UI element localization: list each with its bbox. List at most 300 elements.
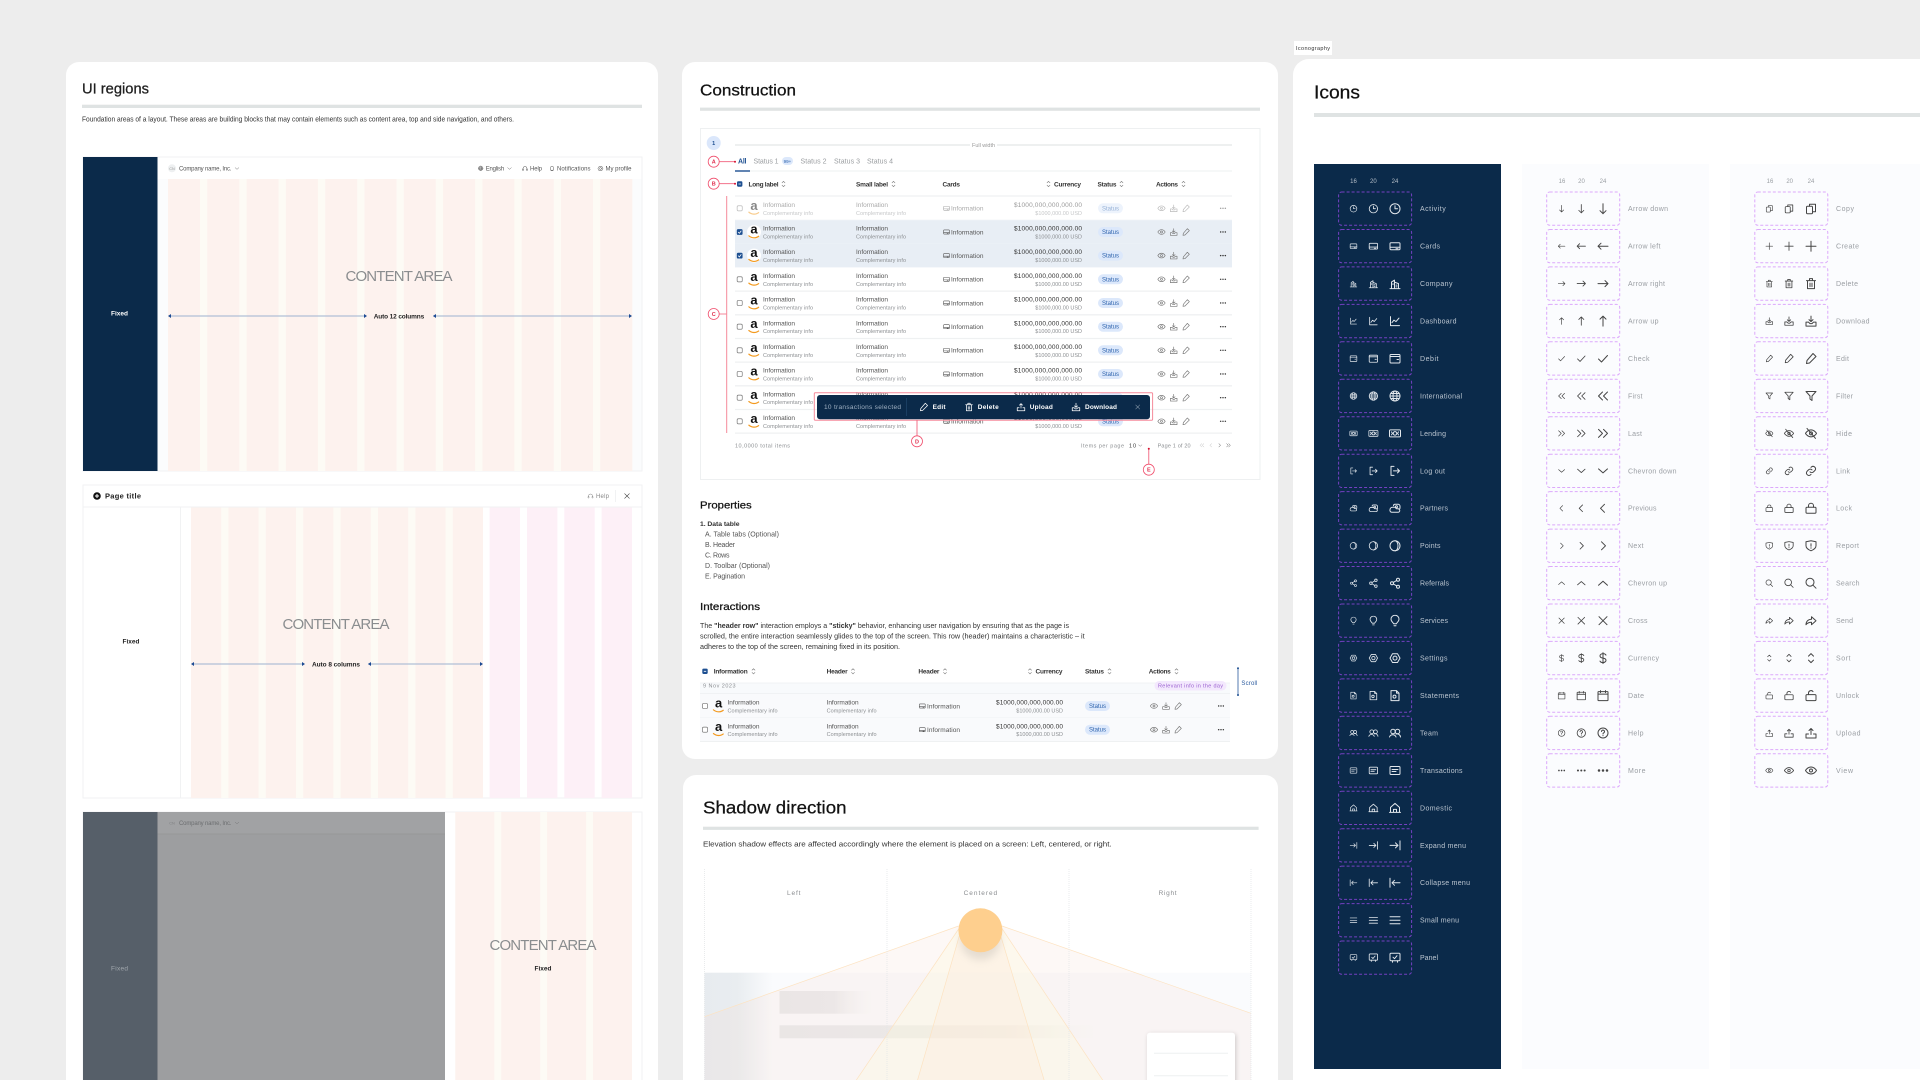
table row 1: disabled: Complementary info — [856, 211, 906, 217]
table row 10: Complementary info — [856, 424, 906, 430]
icon row: Chevron up — [1547, 566, 1667, 600]
icon row: Copy — [1755, 192, 1854, 225]
icon row: Search — [1755, 566, 1860, 600]
toolbar: bulk actions — [814, 393, 1153, 420]
table row 9: $1000,000.00 USD — [1035, 400, 1082, 406]
table row 8: Information — [763, 368, 795, 375]
light rays — [704, 926, 1251, 1080]
icon row: Collapse menu — [1339, 866, 1470, 899]
table tabs — [735, 157, 1232, 171]
sticky table row 1: Information — [728, 700, 760, 707]
icon row: Statements — [1339, 679, 1460, 712]
callout: rows bracket C — [708, 196, 727, 433]
interactions paragraph: scrolled, the entire interaction seamlessly glides to the top of the screen. This row (header) maintains a characteristic – it — [700, 634, 1085, 640]
icon row: Domestic: Domestic — [1420, 805, 1452, 812]
icon row: Referrals — [1339, 566, 1450, 600]
table row 7: a — [750, 340, 758, 355]
label: centered: Centered — [964, 890, 998, 897]
table row 5: Complementary info — [763, 306, 813, 312]
label: content area: CONTENT AREA — [282, 616, 390, 633]
icon row: Arrow down — [1547, 192, 1668, 225]
table row 1: disabled: a — [750, 198, 758, 213]
size header: 24 — [1392, 179, 1399, 185]
callout: tabs A — [708, 156, 736, 167]
region diagram: sidebar with 12 columns — [83, 157, 642, 471]
icon row: Sort: Sort — [1836, 655, 1851, 662]
top bar: Notifications — [557, 166, 590, 172]
arrow: auto 12 columns: Auto 12 columns — [374, 313, 425, 320]
sticky table row 1: Complementary info — [728, 708, 778, 714]
table row 8: Complementary info — [763, 376, 813, 382]
icon row: Cards: Cards — [1420, 244, 1440, 251]
region diagram: overlay drawer — [83, 812, 642, 1080]
icon row: Dashboard — [1339, 304, 1457, 338]
table row 1: disabled: Complementary info — [763, 211, 813, 217]
drawer columns — [455, 812, 632, 1080]
table row 7: $1000,000,000,000.00 — [1014, 344, 1082, 351]
table row 3: selected: Information — [856, 249, 888, 256]
icon row: Statements: Statements — [1420, 693, 1460, 700]
sticky table row 1: Information — [927, 703, 960, 710]
table header row: Cards — [942, 181, 960, 188]
table header row — [735, 181, 1232, 196]
table row 5: Information — [951, 300, 984, 307]
icon row: Chevron down — [1547, 454, 1677, 488]
icon row: Send — [1755, 604, 1853, 637]
dimmed sidebar: Fixed — [111, 965, 128, 972]
icon row: Transactions — [1339, 754, 1463, 787]
top bar — [158, 158, 642, 179]
size header: 20 — [1578, 179, 1585, 185]
icon row: Debit: Debit — [1420, 356, 1439, 363]
sticky table row 2 — [700, 718, 1230, 742]
sticky table row 2: Information — [728, 723, 760, 730]
icon row: Company: Company — [1420, 281, 1453, 288]
table row 1: disabled: Information — [763, 202, 795, 209]
icon row: Send: Send — [1836, 618, 1853, 625]
frame label: Iconography — [1294, 41, 1332, 55]
icon row: Arrow right: Arrow right — [1628, 281, 1665, 288]
icon row: Delete — [1755, 267, 1858, 300]
table row 8: $1000,000,000,000.00 — [1014, 368, 1082, 375]
sticky header row: Currency — [1036, 669, 1063, 676]
table row 4: Information — [856, 273, 888, 280]
interactions paragraph: adheres to the top of the screen, remaining fixed in its position. — [700, 644, 900, 651]
sticky table row 1: $1000,000,000,000.00 — [996, 700, 1063, 707]
table tabs: Status 4 — [867, 158, 893, 166]
table row 2: selected: Complementary info — [763, 234, 813, 240]
icon row: Check: Check — [1628, 356, 1650, 363]
sticky header row: Header — [827, 669, 848, 676]
dimmed sidebar — [83, 812, 158, 1080]
date row: 9 Nov 2023 — [703, 684, 736, 690]
table row 10: $1000,000,000,000.00 — [1014, 415, 1082, 422]
table row 2: selected: $1000,000,000,000.00 — [1014, 226, 1082, 233]
table row 2: selected: Information — [763, 226, 795, 233]
toolbar: bulk actions: Delete — [978, 404, 999, 411]
icon row: Expand menu — [1339, 829, 1466, 862]
table row 5: $1000,000.00 USD — [1035, 306, 1082, 312]
panel: Construction — [682, 62, 1278, 759]
table row 8 — [735, 364, 1232, 386]
size header — [1767, 179, 1815, 185]
table row 2: selected: Status — [1102, 230, 1119, 236]
table tabs: All — [738, 158, 747, 166]
table row 5 — [735, 292, 1232, 315]
icon row: Create: Create — [1836, 244, 1859, 251]
icon row: Activity: Activity — [1420, 206, 1446, 213]
icon row: Report — [1755, 529, 1859, 562]
icon row: Currency: Currency — [1628, 655, 1660, 662]
sticky table row 2: $1000,000,000,000.00 — [996, 723, 1063, 730]
icon row: Referrals: Referrals — [1420, 581, 1450, 588]
callout: pagination E: E — [1147, 468, 1151, 474]
sticky header table — [700, 667, 1257, 742]
table row 8: Information — [856, 368, 888, 375]
table header row: Actions — [1156, 181, 1178, 188]
sticky table row 1 — [700, 694, 1230, 718]
table row 7: Status — [1102, 348, 1119, 354]
full width indicator: Full width — [972, 143, 995, 149]
page title header: Page title — [105, 492, 141, 501]
table row 4: Complementary info — [763, 282, 813, 288]
table row 6: Information — [951, 324, 984, 331]
icon row: Currency — [1547, 641, 1660, 675]
icon row: Filter: Filter — [1836, 393, 1854, 400]
sticky header row: Status — [1085, 669, 1104, 676]
properties list: A. Table tabs (Optional) — [705, 531, 779, 538]
sticky header row: Information — [714, 669, 748, 676]
date row: Relevant info in the day — [1158, 684, 1223, 690]
pagination footer: Page 1 of 20 — [1158, 443, 1191, 449]
callout: toolbar D: D — [915, 439, 919, 445]
light source circle — [958, 908, 1002, 960]
icon row: Copy: Copy — [1836, 206, 1854, 213]
sticky table row 2: Status — [1089, 728, 1106, 734]
callout: rows bracket C: C — [712, 312, 716, 318]
icon row: Domestic — [1339, 791, 1452, 824]
sticky table row 2: Information — [927, 727, 960, 734]
shadow diagram — [704, 869, 1251, 1080]
date row — [700, 681, 1230, 694]
icon row: View — [1755, 754, 1854, 787]
properties list: E. Pagination — [705, 574, 745, 581]
icon row: Chevron up: Chevron up — [1628, 581, 1667, 588]
table row 4: Status — [1102, 277, 1119, 283]
table row 8: Status — [1102, 372, 1119, 378]
icon row: More: More — [1628, 768, 1646, 775]
region diagram: page title with 8 columns — [83, 485, 642, 798]
table row 4: a — [750, 269, 758, 284]
table row 1: disabled: Status — [1102, 206, 1119, 212]
data table anatomy — [700, 128, 1260, 480]
pagination footer: 10 — [1129, 443, 1136, 449]
icon row: Cross — [1547, 604, 1648, 637]
table row 6: a — [750, 316, 758, 331]
table row 5: Information — [763, 297, 795, 304]
icon row: Team: Team — [1420, 730, 1438, 737]
toolbar: bulk actions: Edit — [933, 404, 946, 411]
panel: Icons — [1293, 59, 1920, 1080]
table row 3: selected: Complementary info — [763, 258, 813, 264]
table row 9: a — [750, 387, 758, 402]
label: fixed: Fixed — [122, 638, 140, 645]
table row 3: selected: $1000,000.00 USD — [1035, 258, 1082, 264]
table row 6: Information — [763, 320, 795, 327]
page title header — [93, 490, 629, 502]
table row 10: $1000,000.00 USD — [1035, 424, 1082, 430]
table row 9: Status — [1102, 396, 1119, 402]
table row 10: Information — [951, 419, 984, 426]
sticky table row 2: Information — [827, 723, 859, 730]
heading: Properties: Properties — [700, 500, 752, 512]
table row 2: selected: Information — [856, 226, 888, 233]
top bar: CN — [169, 167, 175, 171]
label: left: Left — [787, 890, 801, 897]
callout: header B: B — [712, 182, 716, 188]
icon row: Company — [1339, 267, 1453, 300]
table row 4: Information — [763, 273, 795, 280]
icon row: Link: Link — [1836, 468, 1850, 475]
heading: Icons: Icons — [1314, 81, 1360, 102]
sticky table row 1: a — [715, 696, 723, 710]
table row 6: Information — [856, 320, 888, 327]
sticky table row 1: Information — [827, 700, 859, 707]
icon row: Expand menu: Expand menu — [1420, 843, 1466, 850]
table row 9: Information — [951, 395, 984, 402]
icon row: Unlock — [1755, 679, 1860, 712]
icon row: Last: Last — [1628, 431, 1642, 438]
label: content area: CONTENT AREA — [346, 268, 452, 285]
icon row: Hide — [1755, 417, 1852, 450]
table row 4: $1000,000.00 USD — [1035, 282, 1082, 288]
properties list: C. Rows — [705, 552, 730, 560]
sidebar: fixed: Fixed — [111, 311, 128, 318]
placeholder bars — [780, 991, 1093, 1038]
icon row: Services: Services — [1420, 618, 1448, 625]
arrow: auto 8 columns — [191, 661, 483, 668]
icon row: Arrow up: Arrow up — [1628, 319, 1659, 326]
icon row: Previous: Previous — [1628, 506, 1657, 513]
table row 2: selected: Information — [951, 229, 984, 236]
callout: header B — [708, 178, 736, 189]
icon row: Log out: Log out — [1420, 468, 1445, 475]
table row 6: $1000,000.00 USD — [1035, 329, 1082, 335]
icon row: View: View — [1836, 768, 1854, 775]
table row 6: $1000,000,000,000.00 — [1014, 320, 1082, 327]
icon row: Unlock: Unlock — [1836, 693, 1860, 700]
icon row: Settings — [1339, 641, 1448, 675]
frame label: Iconography: Iconography — [1296, 46, 1330, 52]
icon row: Help: Help — [1628, 730, 1644, 737]
icon row: Link — [1755, 454, 1850, 488]
panel: UI regions — [66, 62, 658, 1080]
table row 6: Complementary info — [856, 329, 906, 335]
table row 3: selected: Information — [763, 249, 795, 256]
table row 1: disabled: $1000,000.00 USD — [1035, 211, 1082, 217]
icon row: Lending: Lending — [1420, 431, 1446, 438]
sticky header row — [702, 669, 1178, 676]
size header: 20 — [1786, 179, 1794, 185]
page title header: Help — [596, 494, 610, 500]
table row 4: Complementary info — [856, 282, 906, 288]
icon row: Lending — [1339, 417, 1446, 450]
table row 7 — [735, 340, 1232, 362]
table row 1: disabled: $1000,000,000,000.00 — [1014, 202, 1082, 209]
marker 1 — [707, 136, 721, 150]
sticky header row: Actions — [1149, 669, 1171, 676]
label: right: Right — [1159, 890, 1177, 897]
pagination footer: 10,0000 total items — [735, 443, 790, 449]
size header: 16 — [1559, 179, 1566, 185]
icon row: Lock: Lock — [1836, 506, 1852, 513]
table row 10: Complementary info — [763, 424, 813, 430]
interactions paragraph: The "header row" interaction employs a "sticky" behavior, enhancing user navigation by ensuring that as the page is — [700, 623, 1070, 630]
label: content area: CONTENT AREA — [490, 937, 596, 954]
table header row: Long label — [748, 181, 779, 188]
table row 3: selected — [735, 244, 1232, 267]
table row 10: Status — [1102, 419, 1119, 425]
sticky table row 2: $1000,000.00 USD — [1016, 732, 1063, 738]
sticky table row 2: a — [715, 719, 723, 734]
table row 2: selected: Complementary info — [856, 234, 906, 240]
table row 4: $1000,000,000,000.00 — [1014, 273, 1082, 280]
table row 8: Information — [951, 371, 984, 378]
pagination footer: Items per page — [1081, 443, 1124, 449]
heading: Construction: Construction — [700, 83, 796, 100]
arrow: auto 8 columns: Auto 8 columns — [312, 661, 360, 668]
table row 7: Complementary info — [856, 353, 906, 359]
icon row: Panel — [1339, 941, 1438, 974]
icon row: Upload — [1755, 716, 1861, 750]
table row 8: $1000,000.00 USD — [1035, 376, 1082, 382]
table row 10: a — [750, 411, 758, 426]
table header row: Small label — [856, 181, 888, 188]
icon row: Activity — [1339, 192, 1446, 225]
properties list: B. Header — [705, 542, 736, 549]
callout: pagination E — [1143, 448, 1154, 475]
top bar: Help — [530, 166, 543, 172]
icon row: Download: Download — [1836, 319, 1870, 326]
icon row: Arrow left — [1547, 230, 1661, 263]
table row 5: a — [750, 292, 758, 308]
icon row: Dashboard: Dashboard — [1420, 319, 1457, 326]
icon row: Collapse menu: Collapse menu — [1420, 880, 1470, 887]
icon row: International — [1339, 379, 1462, 413]
dimmed content area: CN — [169, 822, 175, 826]
size header: 24 — [1808, 179, 1815, 185]
heading: Interactions: Interactions — [700, 601, 760, 613]
description text: Foundation areas of a layout. These areas are building blocks that may contain elements such as content area, top and side navigation, and others. — [82, 116, 514, 123]
table row 2: selected: a — [750, 222, 758, 236]
size header: 16 — [1350, 179, 1357, 185]
toolbar: bulk actions: 10 transactions selected — [824, 404, 901, 411]
table row 4: Information — [951, 277, 984, 284]
table row 3: selected: Status — [1102, 254, 1119, 260]
table row 5: $1000,000,000,000.00 — [1014, 297, 1082, 304]
icon row: Small menu — [1339, 904, 1459, 937]
table row 3: selected: Complementary info — [856, 258, 906, 264]
properties list — [700, 521, 779, 581]
icon row: Create — [1755, 230, 1859, 263]
icon row: Partners: Partners — [1420, 506, 1448, 513]
icon column: arrows and navigation — [1522, 164, 1709, 1069]
interactions paragraph — [700, 623, 1085, 651]
pagination footer — [735, 443, 1230, 449]
icon row: Edit — [1755, 342, 1849, 375]
sidebar: fixed — [83, 157, 158, 471]
table header row: Currency — [1054, 181, 1081, 188]
table row 8: a — [750, 364, 758, 378]
table row 2: selected: $1000,000.00 USD — [1035, 234, 1082, 240]
table row 1: disabled: Information — [856, 202, 888, 209]
icon row: Team — [1339, 716, 1438, 750]
icon column: dark navigation icons — [1314, 164, 1501, 1069]
icon row: Lock — [1755, 492, 1852, 525]
icon row: Points — [1339, 529, 1441, 562]
icon row: Transactions: Transactions — [1420, 768, 1463, 775]
grid columns — [168, 179, 632, 471]
properties list: 1. Data table — [700, 521, 740, 528]
icon row: Download — [1755, 304, 1870, 338]
icon row: Date: Date — [1628, 693, 1644, 700]
toolbar: bulk actions: Upload — [1030, 404, 1053, 411]
callout: toolbar D — [912, 420, 922, 447]
icon row: Points: Points — [1420, 543, 1441, 550]
icon row: Next: Next — [1628, 543, 1644, 550]
top bar: Company name, Inc. — [179, 166, 232, 172]
table row 3: selected: Information — [951, 253, 984, 260]
sticky table row 2: Complementary info — [827, 732, 877, 738]
table row 5: Information — [856, 297, 888, 304]
callout: tabs A: A — [712, 160, 716, 166]
scroll indicator — [1237, 667, 1257, 696]
table row 9: Information — [856, 391, 888, 398]
size header: 16 — [1767, 179, 1774, 185]
table row 7: $1000,000.00 USD — [1035, 353, 1082, 359]
icon row: Log out — [1339, 454, 1445, 488]
table row 10 — [735, 411, 1232, 433]
table row 9: Complementary info — [856, 400, 906, 406]
scroll indicator: Scroll — [1241, 681, 1257, 687]
table row 6: Complementary info — [763, 329, 813, 335]
sticky table row 1: Complementary info — [827, 708, 877, 714]
table tabs: Status 3 — [834, 158, 860, 166]
icon row: Partners — [1339, 492, 1448, 525]
icon row: Sort — [1755, 641, 1851, 675]
table row 7: Information — [951, 348, 984, 355]
properties list: D. Toolbar (Optional) — [705, 563, 770, 570]
icon row: Settings: Settings — [1420, 655, 1448, 662]
size header: 24 — [1600, 179, 1607, 185]
column guides — [704, 869, 1251, 1080]
marker 1: 1 — [712, 141, 715, 147]
icon row: Small menu: Small menu — [1420, 918, 1459, 925]
icon row: Arrow right — [1547, 267, 1665, 300]
table row 10: Information — [763, 415, 795, 422]
icon row: Upload: Upload — [1836, 730, 1861, 737]
icon row: Arrow up — [1547, 304, 1659, 338]
top bar: My profile — [606, 166, 632, 172]
icon row: Search: Search — [1836, 581, 1860, 588]
panel: Shadow direction — [683, 775, 1278, 1080]
table row 9: Information — [763, 391, 795, 398]
icon row: Cards — [1339, 230, 1440, 263]
icon row: Hide: Hide — [1836, 431, 1852, 438]
table row 9: Complementary info — [763, 400, 813, 406]
icon row: Arrow down: Arrow down — [1628, 206, 1668, 213]
icon row: Edit: Edit — [1836, 356, 1849, 363]
